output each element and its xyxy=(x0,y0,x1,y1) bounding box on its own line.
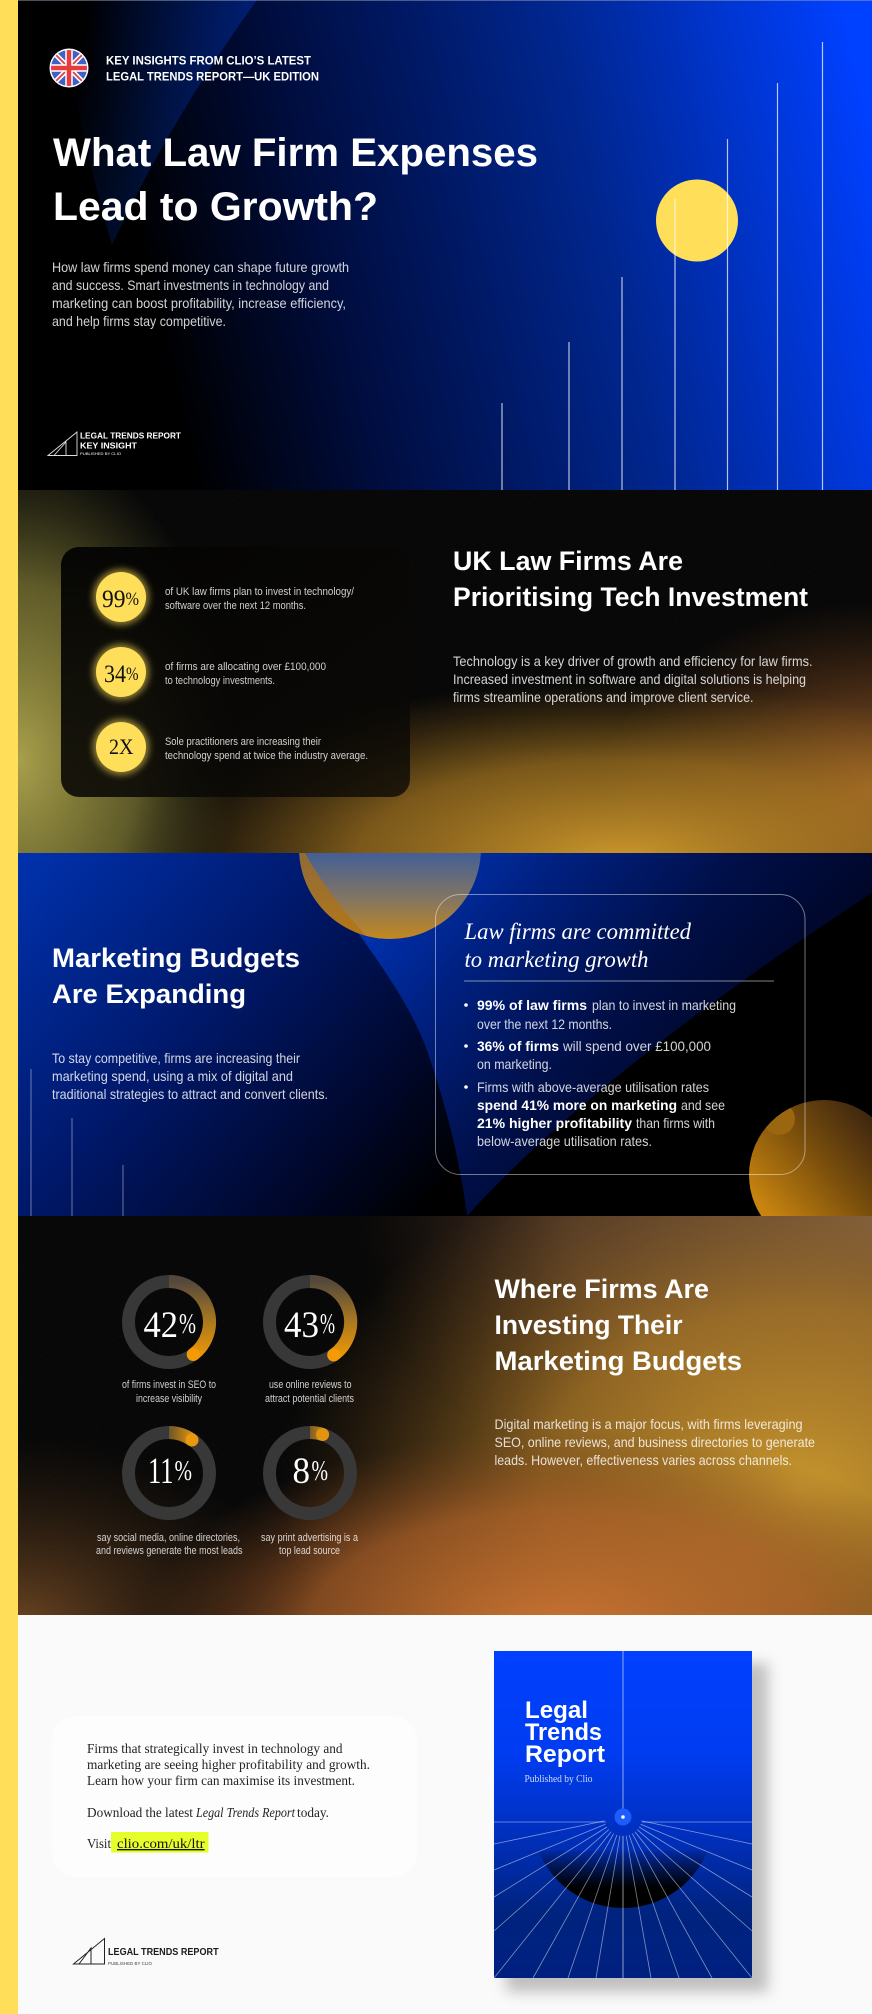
donut chart: 11%: and reviews generate the most leads xyxy=(96,1545,243,1557)
bullet list: on marketing. xyxy=(477,1056,552,1072)
heading: marketing budgets: Are Expanding xyxy=(52,979,246,1009)
donut chart: 43% xyxy=(265,1281,354,1405)
paragraph: where firms invest: leads. However, effectiveness varies across channels. xyxy=(494,1452,792,1468)
stat: 34%: % xyxy=(126,664,139,685)
eyebrow text xyxy=(106,54,319,84)
bullet list: will spend over £100,000 xyxy=(562,1038,711,1054)
bullet list: below-average utilisation rates. xyxy=(477,1133,652,1149)
heading: marketing budgets xyxy=(52,943,300,1009)
cta text: Download the latest xyxy=(87,1805,193,1820)
donut chart: 42%: of firms invest in SEO to xyxy=(122,1379,216,1391)
stat: 99%: software over the next 12 months. xyxy=(165,600,306,612)
donut chart: 11%: say social media, online directories, xyxy=(97,1532,240,1544)
panel: hero header xyxy=(18,0,872,490)
cover title: Trends xyxy=(525,1719,602,1746)
eyebrow text: LEGAL TRENDS REPORT—UK EDITION xyxy=(106,70,319,84)
cover subtitle: Published by Clio xyxy=(524,1774,592,1785)
heading: marketing budgets: Marketing Budgets xyxy=(52,943,300,973)
logo: legal trends report: LEGAL TRENDS REPORT xyxy=(108,1947,219,1958)
cover title xyxy=(525,1697,605,1768)
heading: tech investment: UK Law Firms Are xyxy=(453,546,683,576)
cta text: marketing are seeing higher profitability and growth. xyxy=(87,1757,370,1772)
stat: 99%: % xyxy=(126,589,139,610)
hero gradient background xyxy=(18,0,872,490)
hero translucent wedge xyxy=(60,0,257,245)
logo: legal trends report: PUBLISHED BY CLIO xyxy=(108,1961,152,1966)
invest section background xyxy=(18,1216,872,1615)
bullet list: Firms with above-average utilisation rates xyxy=(477,1079,709,1095)
logo: legal trends report key insight: PUBLISHED BY CLIO xyxy=(80,451,121,456)
cover title: Report xyxy=(525,1741,605,1768)
cta text: Learn how your firm can maximise its investment. xyxy=(87,1773,355,1788)
donut chart: 8%: 8 xyxy=(292,1451,310,1492)
paragraph: marketing budgets xyxy=(52,1050,328,1102)
stat: 99%: of UK law firms plan to invest in technology/ xyxy=(165,586,355,598)
intro paragraph: and success. Smart investments in technology and xyxy=(52,277,329,293)
heading: where firms invest: Investing Their xyxy=(494,1310,683,1340)
cta text: Visit xyxy=(87,1836,111,1851)
donut chart: 8%: top lead source xyxy=(279,1545,340,1557)
heading: tech investment xyxy=(453,546,808,612)
paragraph: tech investment: Increased investment in software and digital solutions is helping xyxy=(453,671,806,687)
card heading: to marketing growth xyxy=(464,947,648,972)
icon: yellow sun circle xyxy=(656,180,738,262)
heading: where firms invest xyxy=(494,1274,742,1376)
marketing wedge xyxy=(305,853,872,1216)
donut chart: 42% xyxy=(122,1282,216,1405)
tech section background xyxy=(18,490,872,853)
stat: 99% xyxy=(93,569,355,625)
donut chart: 8% xyxy=(261,1428,359,1557)
stat: 34%: to technology investments. xyxy=(165,675,275,687)
logo: legal trends report xyxy=(74,1938,219,1966)
logo: legal trends report key insight xyxy=(48,430,182,456)
panel: call to action xyxy=(52,1651,768,1992)
title: Lead to Growth? xyxy=(53,185,378,229)
stat: 34%: 34 xyxy=(104,661,126,688)
stat: 34% xyxy=(93,644,326,700)
yellow side stripe xyxy=(0,0,18,2014)
bullet list: over the next 12 months. xyxy=(477,1016,612,1032)
paragraph: tech investment: firms streamline operations and improve client service. xyxy=(453,689,754,705)
donut chart: 42%: 42 xyxy=(144,1305,178,1346)
panel: where firms invest xyxy=(18,1216,872,1615)
donut chart: 11% xyxy=(96,1432,243,1557)
donut chart: 43%: 43 xyxy=(284,1305,319,1346)
outlined card: commitment xyxy=(436,894,805,1174)
cover black arc xyxy=(539,1851,707,1908)
bullet list: spend 41% more on marketing xyxy=(477,1097,677,1113)
bullet list: 36% of firms xyxy=(477,1038,559,1054)
paragraph: tech investment: Technology is a key driver of growth and efficiency for law firms. xyxy=(453,653,812,669)
donut chart: 43%: % xyxy=(320,1309,335,1340)
icon: UK flag xyxy=(50,48,88,88)
heading: where firms invest: Where Firms Are xyxy=(494,1274,709,1304)
panel: tech investment xyxy=(18,490,872,853)
link highlight: clio.com/uk/ltr xyxy=(117,1836,205,1851)
paragraph: marketing budgets: traditional strategies to attract and convert clients. xyxy=(52,1086,328,1102)
logo: legal trends report key insight: LEGAL TRENDS REPORT xyxy=(80,430,182,440)
bullet list: than firms with xyxy=(636,1115,715,1131)
stat: 2X: Sole practitioners are increasing their xyxy=(165,736,321,748)
paragraph: marketing budgets: marketing spend, using a mix of digital and xyxy=(52,1068,293,1084)
bullet list: and see xyxy=(681,1097,725,1113)
stat: 99%: 99 xyxy=(102,586,126,613)
intro paragraph: and help firms stay competitive. xyxy=(52,313,226,329)
title: What Law Firm Expenses xyxy=(53,131,538,175)
rising vertical lines xyxy=(502,42,822,490)
title xyxy=(53,131,538,229)
donut chart: 11%: % xyxy=(174,1456,192,1487)
donut chart: 11%: 11 xyxy=(148,1451,174,1492)
card heading xyxy=(464,919,691,972)
bullet list: 99% of law firms xyxy=(477,997,587,1013)
heading: tech investment: Prioritising Tech Investment xyxy=(453,582,808,612)
donut chart: 42%: increase visibility xyxy=(136,1393,202,1405)
donut chart: 8%: % xyxy=(312,1456,328,1487)
heading: where firms invest: Marketing Budgets xyxy=(494,1346,742,1376)
intro paragraph: How law firms spend money can shape future growth xyxy=(52,259,349,275)
donut chart: 8%: say print advertising is a xyxy=(261,1532,359,1544)
cta text: Firms that strategically invest in technology and xyxy=(87,1741,343,1756)
cover sunburst lines xyxy=(494,1651,752,1978)
bullet list: plan to invest in marketing xyxy=(592,997,736,1013)
donut chart: 42%: % xyxy=(179,1309,196,1340)
paragraph: where firms invest xyxy=(494,1416,815,1468)
cover focal dot xyxy=(614,1808,632,1826)
cover title: Legal xyxy=(525,1697,588,1724)
donut chart: 43%: attract potential clients xyxy=(265,1393,354,1405)
decorative lines xyxy=(31,1069,123,1216)
decorative top circle xyxy=(299,853,481,939)
cta card xyxy=(52,1716,417,1877)
intro paragraph: marketing can boost profitability, increase efficiency, xyxy=(52,295,346,311)
stat: 2X: 2X xyxy=(109,734,134,759)
cta text: Legal Trends Report xyxy=(195,1805,296,1820)
stat: 2X: technology spend at twice the industry average. xyxy=(165,750,368,762)
decorative bottom right circle xyxy=(749,1100,872,1216)
paragraph: tech investment xyxy=(453,653,812,705)
cta text xyxy=(87,1741,370,1851)
bullet list: 21% higher profitability xyxy=(477,1115,632,1131)
eyebrow text: KEY INSIGHTS FROM CLIO’S LATEST xyxy=(106,54,312,68)
link highlight xyxy=(111,1832,208,1852)
card heading: Law firms are committed xyxy=(464,919,691,944)
paragraph: where firms invest: Digital marketing is a major focus, with firms leveraging xyxy=(494,1416,802,1432)
marketing section background xyxy=(18,853,872,1216)
cta text: today. xyxy=(297,1805,329,1820)
bullet list xyxy=(464,997,736,1149)
intro paragraph xyxy=(52,259,349,329)
panel: marketing budgets xyxy=(18,853,872,1216)
logo: legal trends report key insight: KEY INSIGHT xyxy=(80,440,138,450)
stat: 34%: of firms are allocating over £100,000 xyxy=(165,661,326,673)
stats card xyxy=(61,547,410,797)
report cover xyxy=(494,1651,768,1992)
paragraph: marketing budgets: To stay competitive, firms are increasing their xyxy=(52,1050,300,1066)
stat: 2X xyxy=(93,719,368,775)
donut chart: 43%: use online reviews to xyxy=(269,1379,352,1391)
paragraph: where firms invest: SEO, online reviews, and business directories to generate xyxy=(494,1434,815,1450)
